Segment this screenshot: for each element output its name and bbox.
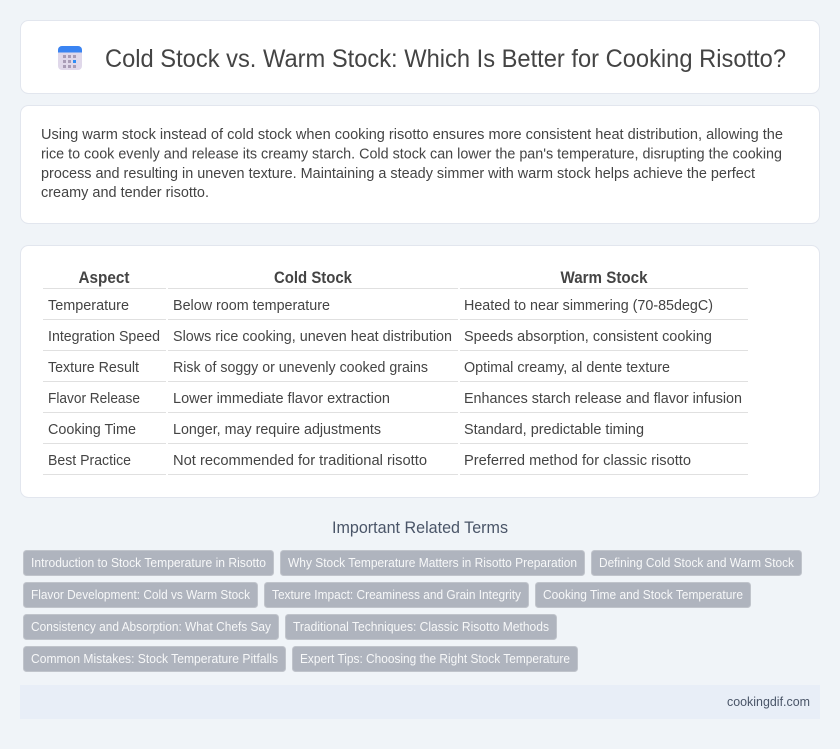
tag bbox=[24, 614, 278, 640]
icon: calendar bbox=[58, 46, 82, 70]
tag: Defining Cold Stock and Warm Stock bbox=[599, 555, 794, 570]
tag bbox=[592, 550, 802, 576]
text block: introduction paragraph: process and resulting in uneven texture. Maintaining a steady simmer with warm stock helps achieve the perfect bbox=[41, 165, 756, 182]
table row: integration speed: Speeds absorption, consistent cooking bbox=[464, 328, 712, 345]
table row: flavor release bbox=[48, 390, 742, 407]
tag bbox=[24, 550, 274, 576]
tag bbox=[536, 582, 750, 608]
table header: Warm Stock bbox=[560, 269, 648, 287]
table row: temperature: Heated to near simmering (70-85degC) bbox=[464, 297, 713, 314]
text block: introduction paragraph: rice to cook evenly and release its creamy starch. Cold stock can lower the pan's temperature, disrupting the cooking bbox=[41, 146, 782, 162]
table row: best practice: Preferred method for classic risotto bbox=[464, 452, 691, 469]
text block: introduction paragraph: creamy and tender risotto. bbox=[41, 184, 209, 201]
table row: temperature: Below room temperature bbox=[173, 297, 330, 314]
table row: cooking time: Standard, predictable timing bbox=[464, 421, 644, 438]
table row: cooking time: Cooking Time bbox=[48, 421, 136, 438]
footer bbox=[20, 685, 820, 719]
table row: texture result: Optimal creamy, al dente texture bbox=[464, 359, 670, 376]
related term tags bbox=[24, 550, 802, 672]
table row: integration speed: Integration Speed bbox=[48, 328, 160, 345]
tag: Traditional Techniques: Classic Risotto Methods bbox=[293, 619, 549, 634]
footer source text: cookingdif.com bbox=[727, 694, 810, 709]
table row: temperature: Temperature bbox=[48, 297, 129, 314]
tag bbox=[286, 614, 556, 640]
text block: introduction paragraph bbox=[41, 126, 783, 201]
text block: introduction paragraph: Using warm stock instead of cold stock when cooking risotto ensures more consistent heat distribution, allowing the bbox=[41, 126, 783, 143]
tag: Cooking Time and Stock Temperature bbox=[543, 587, 743, 602]
table header bbox=[78, 269, 648, 287]
table row: cooking time: Longer, may require adjustments bbox=[173, 421, 381, 438]
table row: temperature bbox=[48, 297, 713, 314]
heading: important related terms: Important Related Terms bbox=[332, 519, 508, 537]
tag: Introduction to Stock Temperature in Risotto bbox=[31, 555, 266, 570]
table row: flavor release: Lower immediate flavor extraction bbox=[173, 390, 390, 407]
table row: integration speed: Slows rice cooking, uneven heat distribution bbox=[173, 328, 452, 345]
tag: Flavor Development: Cold vs Warm Stock bbox=[31, 587, 250, 602]
table header: Cold Stock bbox=[274, 269, 353, 287]
table row: texture result: Risk of soggy or unevenly cooked grains bbox=[173, 359, 428, 376]
table row: flavor release: Enhances starch release and flavor infusion bbox=[464, 390, 742, 407]
table row: cooking time bbox=[48, 421, 644, 438]
tag: Expert Tips: Choosing the Right Stock Temperature bbox=[300, 651, 570, 666]
panel: title header bbox=[20, 20, 820, 94]
table row: flavor release: Flavor Release bbox=[48, 390, 140, 407]
title: Cold Stock vs. Warm Stock: Which Is Better for Cooking Risotto? bbox=[105, 45, 786, 73]
tag bbox=[292, 646, 578, 672]
table header: Aspect bbox=[78, 269, 130, 287]
tag bbox=[264, 582, 528, 608]
tag bbox=[280, 550, 584, 576]
table row: best practice: Best Practice bbox=[48, 452, 131, 469]
table row: best practice: Not recommended for traditional risotto bbox=[173, 452, 427, 469]
tag bbox=[24, 582, 258, 608]
tag bbox=[24, 646, 286, 672]
tag: Why Stock Temperature Matters in Risotto Preparation bbox=[288, 555, 577, 570]
table row: best practice bbox=[48, 452, 691, 469]
panel: introduction bbox=[20, 106, 820, 224]
panel: comparison table bbox=[20, 246, 820, 498]
table row: integration speed bbox=[48, 328, 712, 345]
tag: Texture Impact: Creaminess and Grain Integrity bbox=[272, 587, 521, 602]
tag: Consistency and Absorption: What Chefs Say bbox=[31, 619, 271, 634]
tag: Common Mistakes: Stock Temperature Pitfalls bbox=[31, 651, 278, 666]
table row: texture result: Texture Result bbox=[48, 359, 140, 376]
table row: texture result bbox=[48, 359, 670, 376]
